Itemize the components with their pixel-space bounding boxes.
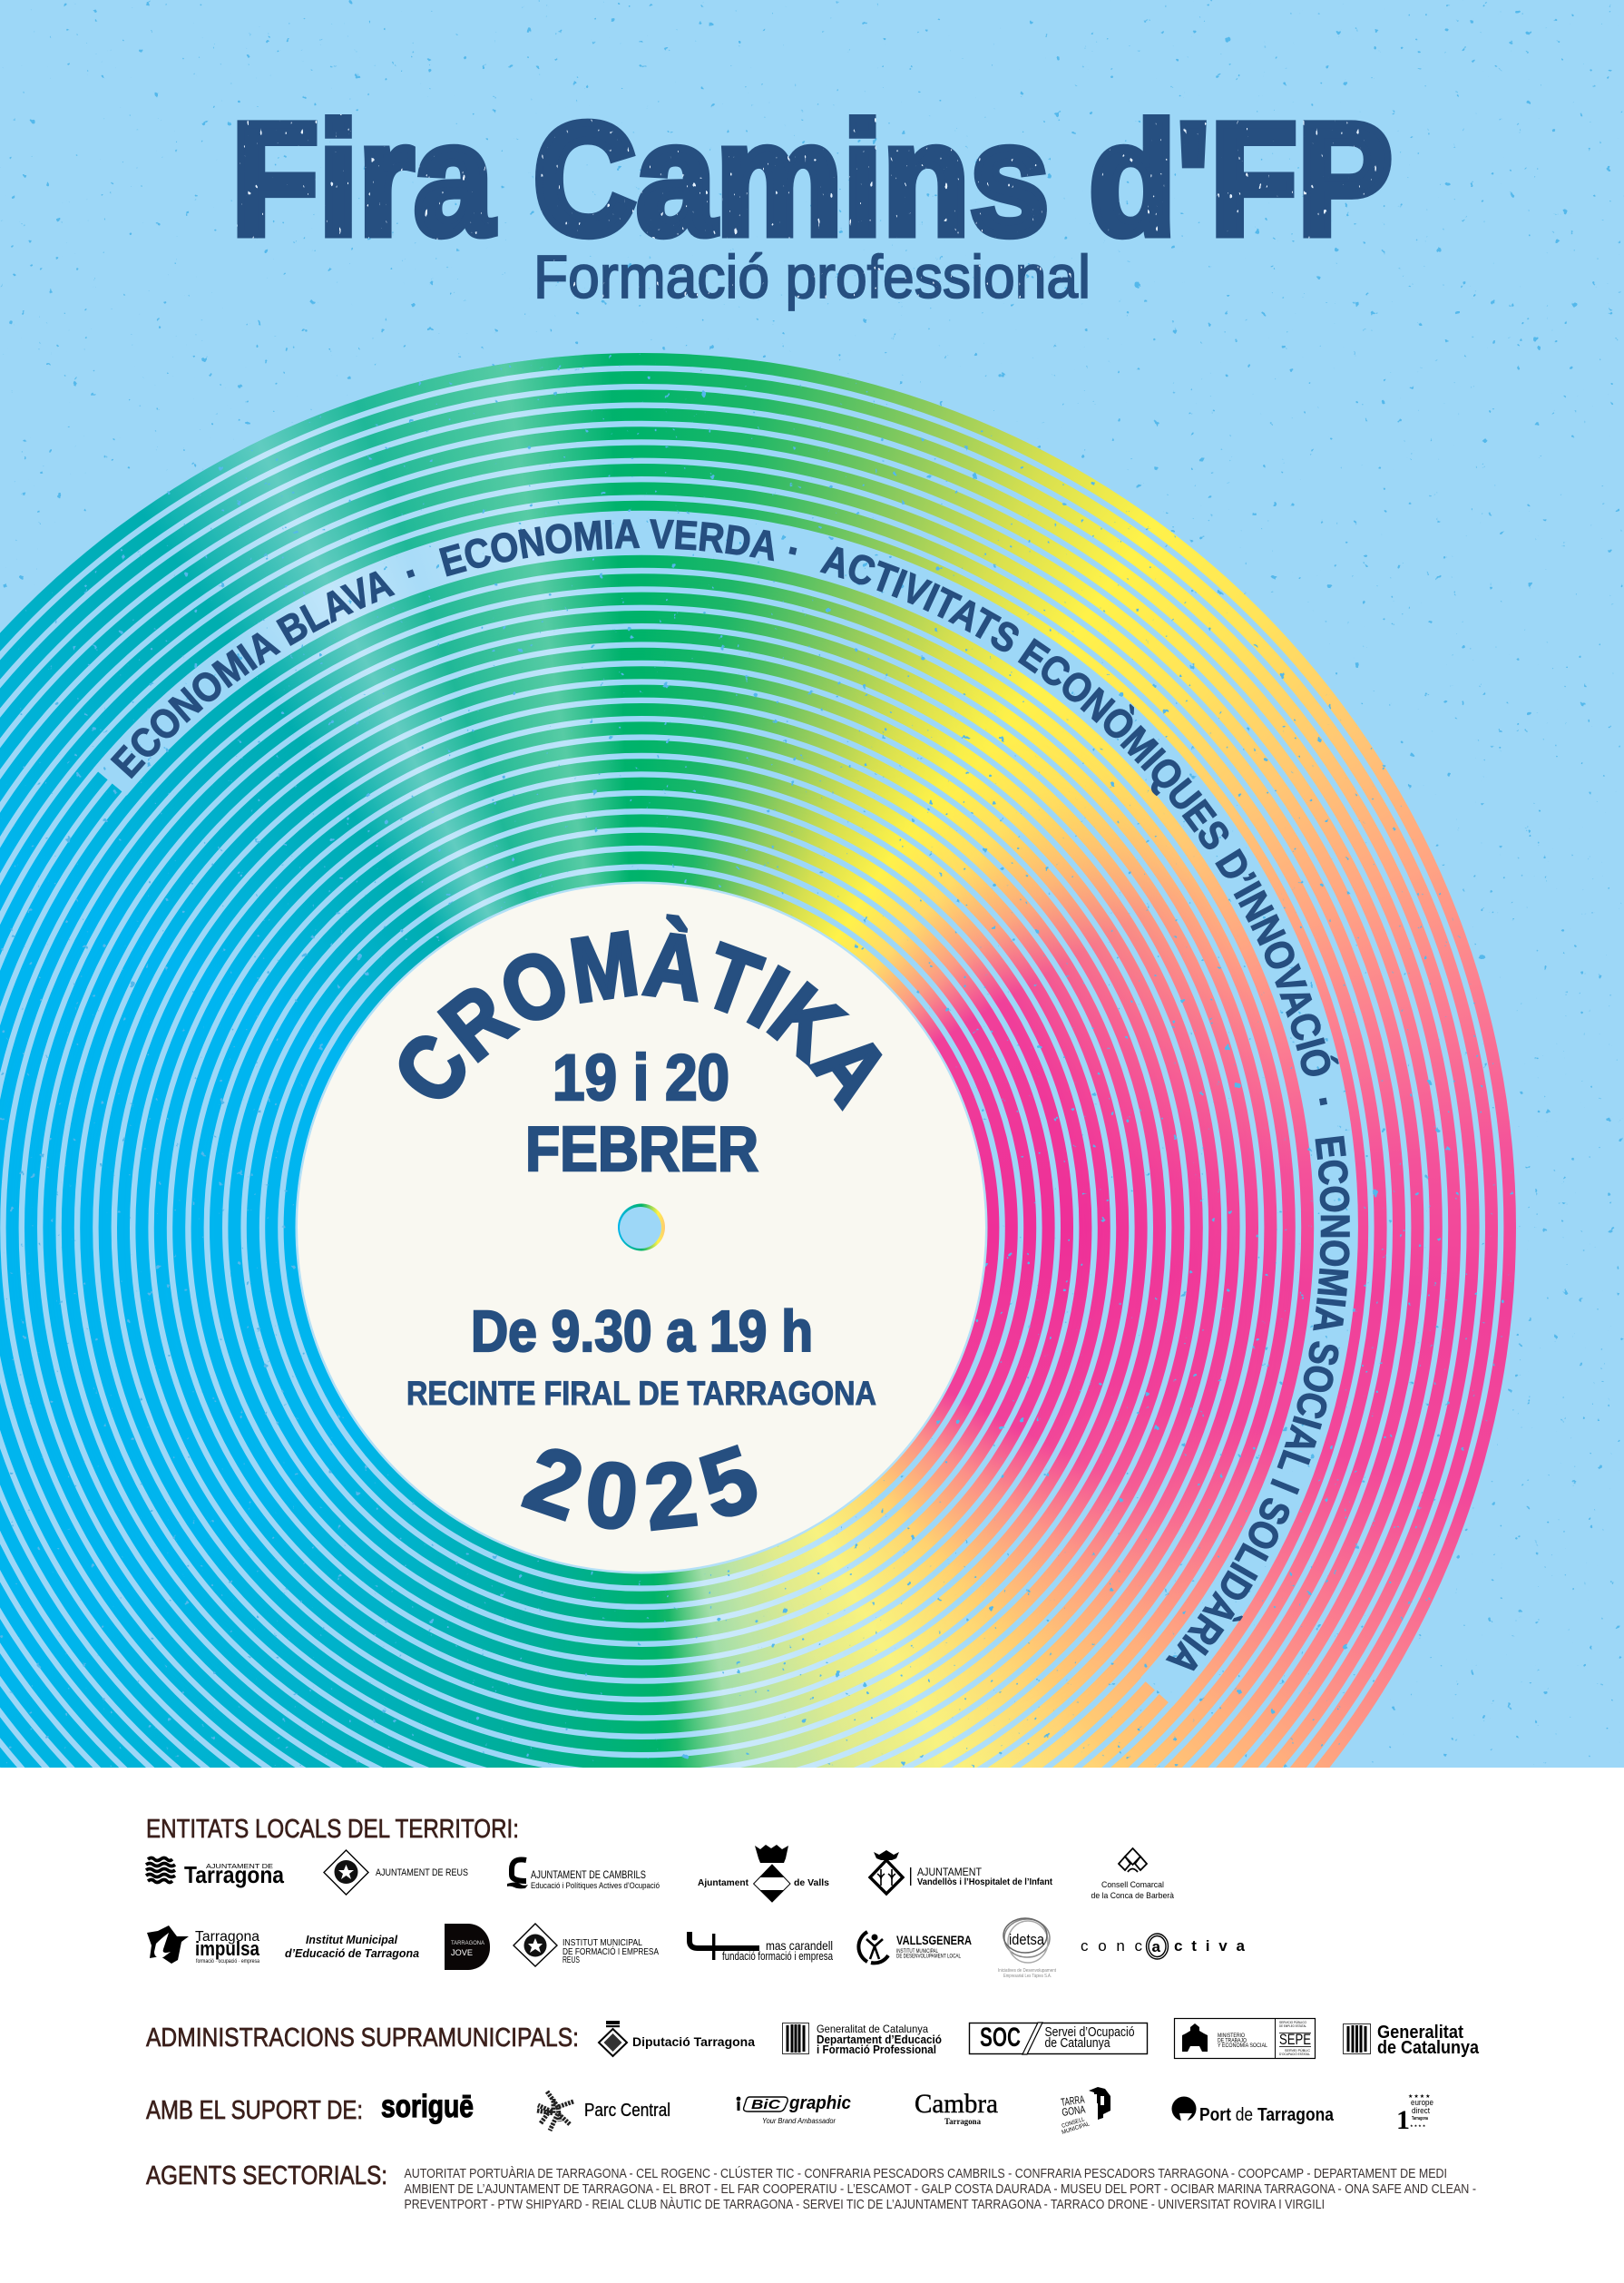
logo: Concactiva: ctiva bbox=[1174, 1937, 1246, 1955]
curved text: economic sectors: · bbox=[406, 569, 416, 579]
logo: Valls Genera: VALLSGENERA bbox=[896, 1933, 972, 1947]
logo: Valls Genera bbox=[858, 1932, 972, 1963]
logo: Idetsa: idetsa bbox=[1009, 1931, 1044, 1948]
logo: Generalitat Departament d'Educació bbox=[782, 2023, 942, 2056]
logo: Tarragona FP Consell Municipal: TARRA bbox=[1060, 2092, 1085, 2109]
logo: Mas Carandell: fundació formació i empresa bbox=[722, 1950, 833, 1963]
date: 19 i 20: 19 i 20 bbox=[553, 1043, 729, 1114]
curved text: economic sectors: · bbox=[1319, 1098, 1327, 1105]
logo: Tarragona FP Consell Municipal: MUNICIPAL bbox=[1061, 2121, 1091, 2136]
logo: Ministerio de Trabajo / SEPE: SERVEI PÚBLIC bbox=[1285, 2049, 1311, 2053]
logo: Institut Municipal de Formació i Empresa Reus: INSTITUT MUNICIPAL bbox=[563, 1937, 642, 1948]
logo: Generalitat Departament d'Educació: Generalitat de Catalunya bbox=[817, 2023, 928, 2035]
logo: Ajuntament de Valls: de Valls bbox=[794, 1878, 829, 1888]
logo: Europe Direct Tarragona bbox=[1396, 2093, 1433, 2135]
logo: Diputació Tarragona bbox=[599, 2021, 755, 2056]
logo: Institut Municipal de Formació i Empresa Reus: DE FORMACIÓ I EMPRESA bbox=[563, 1945, 659, 1957]
logo: Consell Comarcal de la Conca de Barberà: Consell Comarcal bbox=[1101, 1880, 1164, 1890]
logo: Ajuntament Vandellòs i l'Hospitalet de l'Infant bbox=[870, 1850, 1052, 1894]
logo: Ajuntament de Cambrils: Educació i Polítiques Actives d’Ocupació bbox=[531, 1881, 660, 1890]
logo: BIC Graphic bbox=[737, 2093, 851, 2125]
logo: SOC Servei d'Ocupació de Catalunya bbox=[969, 2023, 1147, 2054]
logo: Institut Municipal de Formació i Empresa Reus bbox=[514, 1924, 659, 1966]
subtitle: Formació professional bbox=[533, 243, 1091, 311]
curved text: economic sectors: ECONOMIA SOCIAL I SOLIDÀRIA bbox=[1165, 1136, 1350, 1671]
record grooves bbox=[0, 365, 1504, 1768]
date: febrer: FEBRER bbox=[525, 1113, 758, 1184]
logo: Consell Comarcal de la Conca de Barberà bbox=[1091, 1848, 1175, 1901]
logo: SOC Servei d'Ocupació de Catalunya: SOC bbox=[980, 2023, 1021, 2053]
logo: Institut Municipal d'Educació: d’Educació de Tarragona bbox=[285, 1947, 419, 1960]
artwork layer: speckle, titles, label bbox=[0, 0, 1624, 1768]
logo: Tarragona Jove bbox=[445, 1924, 490, 1970]
logo: Tarragona Impulsa: formació · ocupació · empresa bbox=[196, 1959, 260, 1965]
logo: Cambra Tarragona: Tarragona bbox=[944, 2117, 981, 2126]
logo: Ajuntament de Reus bbox=[324, 1850, 468, 1895]
logo: Tarragona Impulsa: impulsa bbox=[195, 1937, 260, 1960]
logo: Ajuntament de Valls: Ajuntament bbox=[698, 1878, 749, 1888]
logo: Europe Direct Tarragona: 1 bbox=[1396, 2105, 1410, 2135]
curved text: economic sectors bbox=[110, 519, 1350, 1671]
logo: Ministerio de Trabajo / SEPE: DE EMPLEO ESTATAL bbox=[1279, 2024, 1306, 2028]
logo: BIC Graphic: graphic bbox=[788, 2093, 851, 2113]
text block: sector agents list: PREVENTPORT - PTW SHIPYARD - REIAL CLUB NÀUTIC DE TARRAGONA - SERVEI TIC DE L’AJUNTAMENT TARRAGONA - TARRACO DRONE - UNIVERSITAT ROVIRA I VIRGILI bbox=[405, 2197, 1325, 2212]
logo: Generalitat Departament d'Educació: i Formació Professional bbox=[817, 2043, 936, 2056]
curved text: economic sectors: ECONOMIA BLAVA bbox=[110, 571, 396, 779]
logo: SOC Servei d'Ocupació de Catalunya: de Catalunya bbox=[1045, 2035, 1110, 2051]
logo: Mas Carandell: mas carandell bbox=[766, 1938, 833, 1953]
logo: Concactiva bbox=[1081, 1934, 1246, 1959]
logo: Tarragona Impulsa: Tarragona bbox=[195, 1929, 259, 1945]
heading: with the support of: AMB EL SUPORT DE: bbox=[146, 2096, 363, 2125]
logo: Diputació Tarragona: Diputació Tarragona bbox=[632, 2034, 755, 2049]
logo: Port de Tarragona bbox=[1172, 2096, 1335, 2125]
logo: Tarragona Jove: TARRAGONA bbox=[451, 1941, 484, 1946]
logo: Cambra Tarragona: Cambra bbox=[915, 2089, 998, 2119]
logo: Ajuntament de Tarragona bbox=[146, 1858, 284, 1888]
logo: Consell Comarcal de la Conca de Barberà: de la Conca de Barberà bbox=[1091, 1891, 1175, 1901]
logo: Port de Tarragona: Port de Tarragona bbox=[1199, 2105, 1335, 2125]
curved heading: Cromàtika: CROMÀTIKA bbox=[399, 914, 883, 1112]
logo: Tarragona FP Consell Municipal bbox=[1060, 2087, 1110, 2136]
logo: Ajuntament de Tarragona: Tarragona bbox=[184, 1861, 284, 1888]
vinyl record colour disc bbox=[0, 353, 1516, 2102]
logo: Valls Genera: DE DESENVOLUPAMENT LOCAL bbox=[896, 1955, 962, 1960]
logo: Ministerio de Trabajo / SEPE: SEPE bbox=[1279, 2031, 1311, 2048]
logo: SOC Servei d'Ocupació de Catalunya: Servei d’Ocupació bbox=[1045, 2024, 1134, 2040]
logo: Institut Municipal d'Educació: Institut Municipal bbox=[306, 1934, 398, 1946]
logo: Institut Municipal d'Educació bbox=[285, 1934, 419, 1960]
logo: Ajuntament de Tarragona: AJUNTAMENT DE bbox=[206, 1862, 273, 1870]
spindle hole bbox=[618, 1203, 665, 1250]
logo: Ministerio de Trabajo / SEPE: DE TRABAJO bbox=[1218, 2038, 1247, 2043]
curved text: economic sectors: ACTIVITATS ECONÒMIQUES D’INNOVACIÓ bbox=[820, 546, 1339, 1076]
heading: local entities: ENTITATS LOCALS DEL TERRITORI: bbox=[146, 1815, 519, 1844]
curved year: 2025 bbox=[521, 1445, 757, 1532]
text block: sector agents list bbox=[405, 2166, 1476, 2212]
logo: Ajuntament de Valls bbox=[698, 1845, 829, 1902]
logo: Generalitat de Catalunya: de Catalunya bbox=[1377, 2038, 1480, 2058]
logo: Institut Municipal de Formació i Empresa Reus: REUS bbox=[563, 1955, 580, 1965]
text block: sector agents list: AMBIENT DE L’AJUNTAMENT DE TARRAGONA - EL BROT - EL FAR COOPERATIU - L’ESCAMOT - GALP COSTA DAURADA - MUSEU DEL PORT - OCIBAR MARINA TARRAGONA - ONA SAFE AND CLEAN - bbox=[405, 2182, 1476, 2197]
logo: Europe Direct Tarragona: direct bbox=[1412, 2106, 1430, 2116]
schedule: De 9.30 a 19 h bbox=[471, 1298, 813, 1364]
logo: Ministerio de Trabajo / SEPE: Y ECONOMÍA SOCIAL bbox=[1218, 2043, 1268, 2049]
logo: Generalitat Departament d'Educació: Departament d’Educació bbox=[817, 2033, 942, 2046]
logo: Concactiva: a bbox=[1152, 1938, 1161, 1955]
text block: sector agents list: AUTORITAT PORTUÀRIA DE TARRAGONA - CEL ROGENC - CLÚSTER TIC - CONFRARIA PESCADORS CAMBRILS - CONFRARIA PESCADORS TARRAGONA - COOPCAMP - DEPARTAMENT DE MEDI bbox=[405, 2166, 1447, 2181]
venue: RECINTE FIRAL DE TARRAGONA bbox=[406, 1375, 876, 1412]
title: Fira Camins d'FP bbox=[231, 91, 1393, 269]
logo: Tarragona Impulsa bbox=[147, 1925, 260, 1965]
logo: Idetsa: Empresarial Les Tàpies S.A. bbox=[1003, 1974, 1052, 1979]
logo: Tarragona FP Consell Municipal: GONA bbox=[1061, 2102, 1086, 2119]
panel: blue upper area with vinyl record bbox=[0, 0, 1624, 1768]
curved text: economic sectors: ECONOMIA VERDA bbox=[439, 519, 775, 577]
logo: Tarragona Jove: JOVE bbox=[451, 1948, 473, 1958]
heading: supramunicipal administrations: ADMINISTRACIONS SUPRAMUNICIPALS: bbox=[146, 2023, 579, 2053]
logo: Ajuntament de Cambrils: AJUNTAMENT DE CAMBRILS bbox=[531, 1870, 646, 1881]
logo: Europe Direct Tarragona: ★★★★ bbox=[1408, 2093, 1432, 2100]
logo: Parc Central bbox=[537, 2092, 670, 2131]
logo: Europe Direct Tarragona: Tarragona bbox=[1412, 2116, 1428, 2121]
record centre label bbox=[296, 882, 987, 1573]
logo: Ministerio de Trabajo / SEPE bbox=[1174, 2018, 1316, 2058]
logo: Mas Carandell bbox=[690, 1932, 833, 1963]
record light sheen bbox=[0, 353, 1516, 2102]
logo: BIC Graphic: Your Brand Ambassador bbox=[762, 2117, 836, 2125]
inner colour zone of the record bbox=[715, 695, 1259, 1574]
logo: Idetsa bbox=[998, 1918, 1056, 1979]
logo: Ajuntament de Cambrils bbox=[507, 1859, 660, 1890]
logo: BIC Graphic: BiC bbox=[751, 2097, 781, 2112]
logo: Parc Central: Parc Central bbox=[584, 2101, 670, 2121]
logo: Concactiva: conc bbox=[1081, 1937, 1143, 1955]
logo: Idetsa: Iniciatives de Desenvolupament bbox=[998, 1968, 1056, 1974]
logo: Generalitat de Catalunya bbox=[1343, 2023, 1480, 2058]
logo: Europe Direct Tarragona: europe bbox=[1411, 2098, 1433, 2108]
curved text: economic sectors: · bbox=[789, 546, 797, 555]
logo: Europe Direct Tarragona: ★★★★ bbox=[1410, 2123, 1426, 2128]
logo: Ajuntament de Reus: AJUNTAMENT DE REUS bbox=[376, 1867, 468, 1878]
logo: Ministerio de Trabajo / SEPE: MINISTERIO bbox=[1218, 2033, 1245, 2039]
logo: Tarragona FP Consell Municipal: CONSELL bbox=[1061, 2116, 1086, 2130]
logo: Sorigué: soriguē bbox=[381, 2089, 474, 2124]
logo: Ministerio de Trabajo / SEPE: SERVICIO PÚBLICO bbox=[1279, 2021, 1306, 2024]
logo: Ministerio de Trabajo / SEPE: D’OCUPACIÓ ESTATAL bbox=[1279, 2052, 1310, 2056]
logo: Valls Genera: INSTITUT MUNICIPAL bbox=[896, 1949, 938, 1955]
logo: Ajuntament Vandellòs i l'Hospitalet de l'Infant: Vandellòs i l’Hospitalet de l’Infant bbox=[917, 1876, 1052, 1887]
logo: Generalitat de Catalunya: Generalitat bbox=[1377, 2023, 1463, 2043]
logo: Ajuntament Vandellòs i l'Hospitalet de l'Infant: AJUNTAMENT bbox=[917, 1866, 983, 1878]
heading: sector agents: AGENTS SECTORIALS: bbox=[146, 2161, 387, 2190]
